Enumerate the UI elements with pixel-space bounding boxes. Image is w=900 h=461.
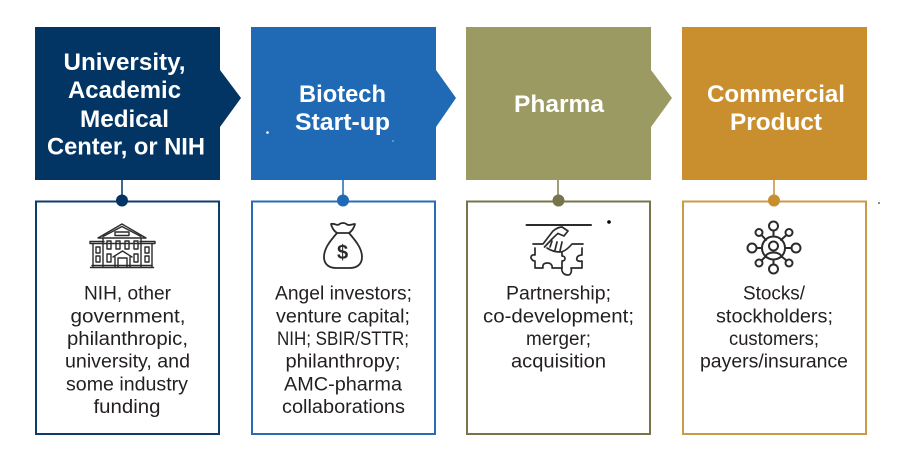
content box: pharma xyxy=(467,202,650,434)
body text: biotech xyxy=(275,284,412,418)
body text: biotech: AMC-pharma xyxy=(284,374,402,396)
body text: pharma: acquisition xyxy=(511,352,606,373)
body text: university xyxy=(65,284,190,418)
connector dot: university xyxy=(116,194,128,206)
heading: university: Medical xyxy=(80,106,169,133)
heading: university xyxy=(47,49,205,160)
heading block: commercial xyxy=(682,27,867,180)
heading: commercial: Commercial xyxy=(707,81,845,108)
heading: commercial xyxy=(707,81,845,136)
icon: money bag: $ xyxy=(337,242,348,264)
content box: biotech xyxy=(252,202,435,434)
heading: biotech: Start-up xyxy=(295,109,390,136)
panel: pharma column xyxy=(466,27,672,434)
body text: pharma: co-development; xyxy=(483,306,634,328)
body text: commercial: payers/insurance xyxy=(700,352,848,373)
content box: university xyxy=(36,202,219,434)
heading: university: Academic xyxy=(68,77,181,104)
panel: commercial column xyxy=(682,27,867,434)
body text: commercial: Stocks/ xyxy=(743,284,806,304)
heading: biotech xyxy=(295,81,390,136)
body text: biotech: NIH; SBIR/STTR; xyxy=(277,329,409,350)
body text: commercial: stockholders; xyxy=(716,306,833,328)
body text: biotech: philanthropy; xyxy=(286,352,400,372)
heading: university: Center, or NIH xyxy=(47,134,205,160)
body text: commercial xyxy=(700,284,848,373)
icon: money bag xyxy=(324,223,362,268)
body text: university: university, and xyxy=(65,352,190,373)
connector: biotech xyxy=(342,180,344,201)
body text: biotech: Angel investors; xyxy=(275,284,412,304)
heading chevron: pharma xyxy=(466,27,672,180)
body text: biotech: collaborations xyxy=(282,397,405,418)
heading: university: University, xyxy=(64,49,186,76)
body text: university: philanthropic, xyxy=(67,329,188,350)
connector dot: biotech xyxy=(337,194,349,206)
body text: pharma: merger; xyxy=(526,329,591,350)
heading: pharma: Pharma xyxy=(514,91,605,118)
heading: biotech: Biotech xyxy=(299,81,386,108)
icon: university building xyxy=(90,224,155,268)
panel: university column xyxy=(35,27,241,434)
connector dot: pharma xyxy=(552,194,564,206)
icon: handshake over puzzle pieces xyxy=(526,225,591,275)
heading: commercial: Product xyxy=(730,109,822,136)
connector dot: commercial xyxy=(768,194,780,206)
body text: pharma xyxy=(483,284,634,373)
body text: university: funding xyxy=(94,397,160,418)
body text: commercial: customers; xyxy=(729,329,819,350)
content box: commercial xyxy=(683,202,866,434)
body text: university: some industry xyxy=(66,375,189,396)
panel: biotech column xyxy=(251,27,456,434)
body text: biotech: venture capital; xyxy=(276,306,410,328)
body text: university: government, xyxy=(70,306,186,328)
icon: stakeholder network xyxy=(748,222,800,274)
heading chevron: university xyxy=(35,27,241,180)
connector: university xyxy=(121,180,123,201)
heading chevron: biotech xyxy=(251,27,456,180)
connector: pharma xyxy=(557,180,559,201)
body text: pharma: Partnership; xyxy=(506,284,611,304)
connector: commercial xyxy=(773,180,775,201)
body text: university: NIH, other xyxy=(84,284,172,304)
